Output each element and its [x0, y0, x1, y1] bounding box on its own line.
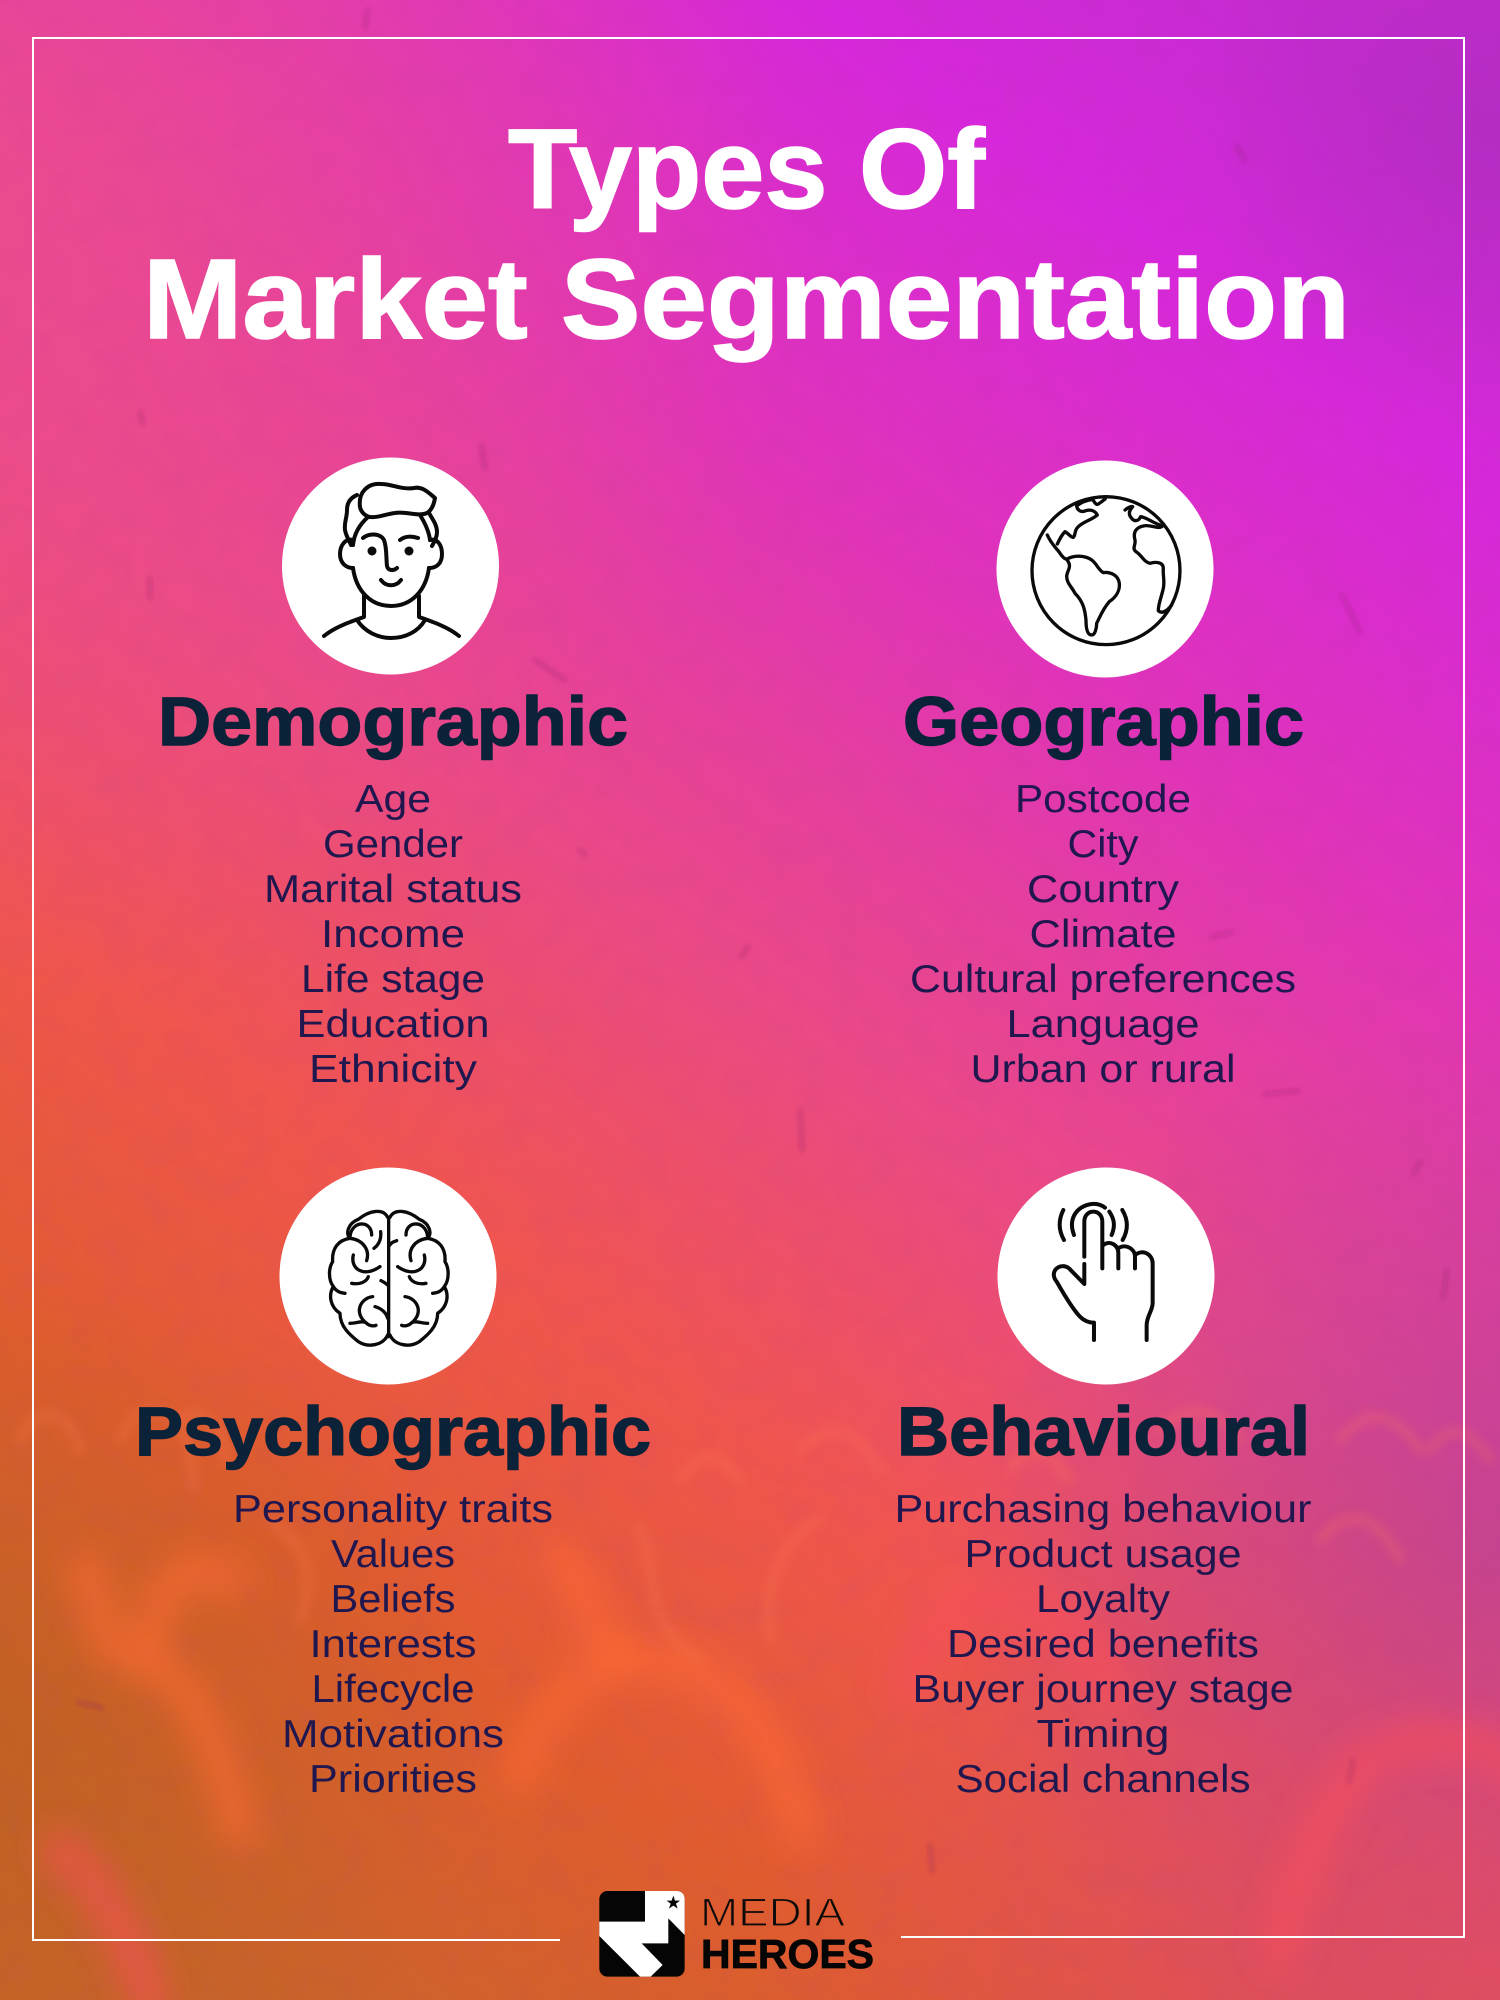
- heading: Demographic: Demographic: [158, 683, 628, 760]
- logo: Media Heroes: [599, 1891, 874, 1977]
- list: demographic items: Education: [296, 1003, 490, 1046]
- list: psychographic items: Interests: [310, 1623, 476, 1666]
- list: psychographic items: Priorities: [309, 1758, 477, 1801]
- panel: demographic: [158, 458, 628, 1091]
- list: demographic items: Income: [321, 913, 465, 956]
- list: psychographic items: Motivations: [282, 1713, 504, 1756]
- list: demographic items: Ethnicity: [309, 1048, 478, 1091]
- list: demographic items: Life stage: [301, 958, 485, 1001]
- list: geographic items: City: [1068, 823, 1139, 866]
- list: behavioural items: Desired benefits: [947, 1623, 1259, 1666]
- heading: Psychographic: Psychographic: [135, 1393, 651, 1470]
- list: behavioural items: Timing: [1036, 1713, 1170, 1756]
- wordmark: MEDIA: [700, 1891, 845, 1935]
- list: psychographic items: [233, 1488, 553, 1801]
- icon: brain in white circle: [280, 1168, 496, 1384]
- panel: geographic: [903, 460, 1304, 1091]
- list: psychographic items: Lifecycle: [312, 1668, 474, 1711]
- list: geographic items: [910, 778, 1296, 1091]
- list: geographic items: Country: [1027, 868, 1180, 911]
- icon: tapping hand in white circle: [998, 1168, 1214, 1384]
- title: Types Of: [508, 106, 985, 232]
- list: behavioural items: Loyalty: [1036, 1578, 1171, 1621]
- list: demographic items: Marital status: [264, 868, 522, 911]
- list: psychographic items: Personality traits: [233, 1488, 553, 1531]
- heading: Behavioural: Behavioural: [897, 1393, 1310, 1470]
- list: demographic items: Gender: [323, 823, 463, 866]
- title: [143, 106, 1350, 362]
- list: geographic items: Climate: [1030, 913, 1176, 956]
- list: geographic items: Postcode: [1015, 778, 1191, 821]
- list: behavioural items: Product usage: [964, 1533, 1242, 1576]
- icon: person in white circle: [282, 458, 499, 674]
- list: behavioural items: Buyer journey stage: [912, 1668, 1294, 1711]
- background: crowd silhouettes: [20, 1410, 1500, 2000]
- list: psychographic items: Values: [331, 1533, 455, 1576]
- list: demographic items: Age: [355, 778, 431, 821]
- heading: Geographic: Geographic: [903, 683, 1304, 760]
- list: psychographic items: Beliefs: [330, 1578, 456, 1621]
- panel: psychographic: [135, 1168, 651, 1801]
- title: Market Segmentation: [143, 236, 1350, 362]
- list: geographic items: Urban or rural: [970, 1048, 1236, 1091]
- list: geographic items: Cultural preferences: [910, 958, 1296, 1001]
- wordmark: [700, 1891, 874, 1977]
- wordmark: HEROES: [701, 1931, 874, 1977]
- list: behavioural items: [894, 1488, 1312, 1801]
- panel: behavioural: [894, 1168, 1312, 1801]
- icon: globe in white circle: [996, 460, 1214, 678]
- list: behavioural items: Purchasing behaviour: [894, 1488, 1312, 1531]
- list: geographic items: Language: [1006, 1003, 1200, 1046]
- list: behavioural items: Social channels: [956, 1758, 1250, 1801]
- list: demographic items: [264, 778, 522, 1091]
- icon: logo mark: [599, 1891, 685, 1977]
